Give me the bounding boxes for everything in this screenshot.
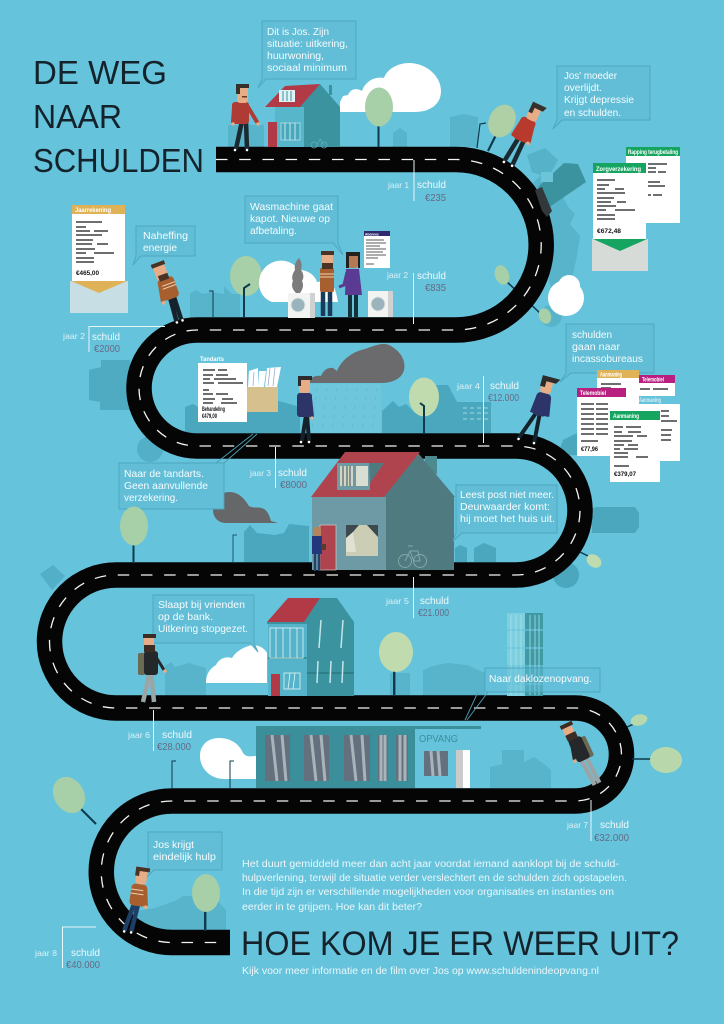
- documents: aanmaningen: €379,07: [614, 471, 636, 478]
- year label: jaar 3: [249, 447, 307, 491]
- year label: jaar 6: [127, 710, 192, 753]
- background city silhouettes: [40, 114, 639, 930]
- documents: aanmaningen: Aanmaning: [600, 372, 622, 378]
- year label: jaar 5: €21.000: [418, 607, 449, 619]
- year label: jaar 1: [387, 160, 446, 204]
- year label: jaar 2 left: [62, 326, 165, 355]
- document: tandarts: [198, 356, 247, 422]
- cloud: top: [340, 63, 441, 112]
- person: Jos navy sweater: [517, 373, 560, 447]
- year label: jaar 8: jaar 8: [34, 948, 57, 958]
- year label: jaar 7: jaar 7: [566, 820, 588, 830]
- callout: incassobureaus: gaan naar: [572, 341, 621, 353]
- tower building: [507, 613, 543, 696]
- callout: wasmachine: Wasmachine gaat: [250, 201, 333, 213]
- tree: leaning: [483, 100, 521, 151]
- document: jaarrekening: [70, 205, 128, 313]
- house: Jos' home large: [311, 452, 455, 570]
- callout: jos krijgt hulp: eindelijk hulp: [153, 851, 216, 863]
- cloud: washing machine: [259, 261, 338, 302]
- documents: zorgverzekering: Zorgverzekering: [596, 166, 641, 173]
- year label: jaar 5: [385, 577, 449, 619]
- title: NAAR: [33, 98, 122, 135]
- road: [50, 160, 622, 942]
- callout: moeder overlijdt: en schulden.: [564, 107, 621, 119]
- document: abonnement: [364, 231, 390, 268]
- washing machine right: [368, 291, 393, 317]
- callout: naheffing energie: [133, 226, 195, 265]
- grey cloud: [213, 492, 278, 523]
- documents: zorgverzekering: €672,48: [597, 228, 621, 235]
- person: Jos with backpack: [138, 634, 167, 702]
- tree: [409, 378, 439, 433]
- year label: jaar 3: jaar 3: [249, 468, 271, 478]
- callout: naar de tandarts: [119, 434, 257, 509]
- callout: leest post niet meer: hij moet het huis uit.: [460, 513, 555, 525]
- callout: naheffing energie: energie: [143, 242, 177, 254]
- year label: jaar 1: schuld: [417, 179, 446, 191]
- callout: naar de tandarts: Geen aanvullende: [124, 480, 208, 492]
- body text: eerder in te grijpen. Hoe kan dit beter?: [242, 902, 423, 913]
- opvang building: OPVANG: [419, 733, 458, 745]
- house: Jos' home: [265, 84, 340, 148]
- callout: moeder overlijdt: overlijdt.: [564, 82, 602, 94]
- year label: jaar 2: [386, 270, 446, 324]
- tree: [192, 874, 220, 931]
- year label: jaar 2: schuld: [417, 270, 446, 282]
- box with files: [247, 367, 281, 412]
- person: deurwaarder: [312, 527, 326, 571]
- callout: moeder overlijdt: [553, 66, 650, 129]
- callout: leest post niet meer: Deurwaarder komt:: [460, 501, 550, 513]
- callout: Dit is Jos: Dit is Jos. Zijn: [267, 26, 329, 38]
- opvang building: [256, 726, 481, 788]
- callout: slaapt bij vrienden: op de bank.: [158, 611, 213, 623]
- body text: [242, 859, 627, 913]
- document: tandarts: €479,00: [202, 413, 217, 420]
- year label: jaar 2: jaar 2: [386, 270, 408, 280]
- year label: jaar 3: €8000: [280, 479, 307, 491]
- tree: small right: [580, 551, 604, 571]
- callout: naar daklozenopvang: Naar daklozenopvang.: [489, 673, 592, 685]
- title: SCHULDEN: [33, 142, 204, 179]
- callout: naar daklozenopvang: [465, 668, 600, 720]
- callout: wasmachine: afbetaling.: [250, 225, 297, 237]
- document: abonnement: Abonnee: [365, 232, 380, 236]
- year label: jaar 1: jaar 1: [387, 180, 409, 190]
- year label: jaar 4: jaar 4: [456, 381, 480, 391]
- person: Jos falling in red shirt: [501, 100, 547, 170]
- house: tilted: [527, 148, 586, 217]
- person: woman: [339, 252, 362, 317]
- documents: aanmaningen: €77,96: [581, 446, 598, 453]
- trees: right of road: [627, 712, 682, 773]
- callout: moeder overlijdt: Jos' moeder: [564, 70, 617, 82]
- year label: jaar 8: schuld: [71, 947, 100, 959]
- document: jaarrekening: Jaarrekening: [75, 207, 111, 214]
- callout: moeder overlijdt: Krijgt depressie: [564, 94, 634, 106]
- document: tandarts: Behandeling: [202, 406, 225, 413]
- cloud: rain: [308, 344, 404, 433]
- callout: Dit is Jos: [258, 21, 356, 88]
- callout: naar de tandarts: Naar de tandarts.: [124, 468, 204, 480]
- tree: left leaning: [47, 771, 96, 824]
- documents: zorgverzekering: [592, 147, 680, 271]
- year label: jaar 2 left: schuld: [92, 331, 120, 343]
- cloud: right of road: [548, 275, 584, 316]
- body text: hulpverlening, terwijl de situatie verder verslechtert en de schulden zich opstapelen.: [242, 873, 627, 884]
- tree and lamp by road: [120, 506, 237, 562]
- callout: incassobureaus: incassobureaus: [572, 353, 643, 365]
- year label: jaar 8: €40.000: [66, 959, 100, 971]
- lamp post: [477, 123, 486, 148]
- document: jaarrekening: €465,00: [76, 270, 99, 277]
- year label: jaar 2 left: €2000: [94, 343, 120, 355]
- callout: leest post niet meer: Leest post niet meer.: [460, 489, 554, 501]
- link text: Kijk voor meer informatie en de film over Jos op www.schuldenindeopvang.nl: [242, 966, 599, 977]
- document: tandarts: Tandarts: [200, 356, 225, 363]
- person: Jos with saleswoman: [320, 251, 334, 316]
- tree: [379, 632, 413, 696]
- callout: incassobureaus: [560, 324, 654, 382]
- callout: Dit is Jos: sociaal minimum: [267, 62, 347, 74]
- documents: aanmaningen: Telemobiel: [580, 390, 606, 397]
- documents: zorgverzekering: Rapping terugbetaling: [628, 149, 678, 156]
- year label: jaar 5: schuld: [420, 595, 449, 607]
- person: Jos in red shirt: [231, 84, 260, 151]
- heading: hoe kom je er weer uit: HOE KOM JE ER WEER UIT?: [241, 925, 679, 963]
- lamps: [172, 761, 234, 788]
- callout: jos krijgt hulp: [144, 832, 222, 880]
- callout: naar de tandarts: verzekering.: [124, 492, 178, 504]
- year label: jaar 3: schuld: [278, 467, 307, 479]
- year label: jaar 6: schuld: [162, 729, 192, 741]
- callout: slaapt bij vrienden: Slaapt bij vrienden: [158, 599, 245, 611]
- washing machine left: [288, 293, 315, 318]
- person: Jos with backpack falling: [557, 718, 606, 789]
- year label: jaar 6: €28.000: [157, 741, 191, 753]
- callout: wasmachine: [245, 196, 343, 255]
- documents: aanmaningen: [577, 370, 680, 482]
- callout: slaapt bij vrienden: [153, 595, 258, 652]
- body text: Het duurt gemiddeld meer dan acht jaar voordat iemand aanklopt bij de schuld-: [242, 859, 619, 870]
- tree: behind road, crossing: [492, 263, 553, 326]
- person: Jos bearded falling: [148, 259, 189, 326]
- title: [33, 54, 204, 179]
- year label: jaar 1: €235: [425, 192, 446, 204]
- smoke: [292, 258, 303, 293]
- year label: jaar 2 left: jaar 2: [62, 331, 85, 341]
- year label: jaar 4: schuld: [490, 380, 519, 392]
- person: Jos walking, helped: [123, 866, 153, 935]
- callout: naheffing energie: Naheffing: [143, 230, 188, 242]
- title: DE WEG: [33, 54, 167, 91]
- person: Jos worried: [297, 376, 314, 443]
- house: friends: [267, 598, 354, 696]
- year label: jaar 4: €12.000: [488, 392, 519, 404]
- body text: In die tijd zijn er verschillende mogelijkheden voor organisaties en instanties om: [242, 887, 614, 898]
- year label: jaar 4: [456, 376, 519, 443]
- callout: leest post niet meer: [453, 485, 557, 541]
- callout: Dit is Jos: situatie: uitkering,: [267, 38, 348, 50]
- callout: wasmachine: kapot. Nieuwe op: [250, 213, 330, 225]
- callout: slaapt bij vrienden: Uitkering stopgezet.: [158, 623, 248, 635]
- tree: [365, 88, 393, 147]
- year label: jaar 7: €32.000: [594, 832, 629, 844]
- callout: incassobureaus: schulden: [572, 329, 612, 341]
- year label: jaar 8: [34, 927, 100, 971]
- documents: aanmaningen: Telemobiel: [642, 376, 664, 384]
- documents: aanmaningen: Aanmaning: [613, 413, 639, 420]
- tree and lamp: [209, 256, 262, 317]
- year label: jaar 2: €835: [425, 282, 446, 294]
- documents: aanmaningen: Aanmaning: [639, 397, 661, 404]
- year label: jaar 5: jaar 5: [385, 596, 409, 606]
- callout: jos krijgt hulp: Jos krijgt: [153, 839, 194, 851]
- year label: jaar 6: jaar 6: [127, 730, 150, 740]
- building windows: [463, 408, 493, 419]
- cloud: friends' house: [206, 645, 267, 683]
- year label: jaar 7: [566, 800, 629, 844]
- year label: jaar 7: schuld: [600, 819, 629, 831]
- cloud: shelter: [200, 738, 256, 779]
- callout: Dit is Jos: huurwoning,: [267, 50, 324, 62]
